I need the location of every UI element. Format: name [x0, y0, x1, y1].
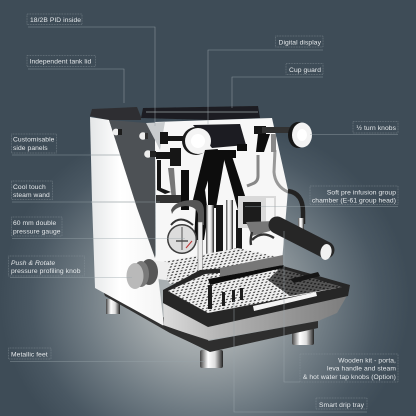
callout: soft pre infusion group chamber: Soft pre infusion group [327, 190, 396, 196]
callout: half turn knobs: ½ turn knobs [356, 124, 397, 132]
callout: customisable side panels: Customisable [13, 136, 55, 144]
white handle bar [253, 292, 317, 311]
callout: digital display: Digital display [279, 40, 322, 46]
callout: smart drip tray: Smart drip tray [319, 402, 365, 409]
callout: cup guard: Cup guard [289, 67, 321, 74]
chrome columns [171, 200, 242, 255]
right steam valve [247, 126, 290, 192]
callout: cup guard [232, 64, 323, 108]
callout: push and rotate pressure profiling knob: Push & Rotate [11, 260, 55, 267]
grate [168, 269, 342, 313]
callout: 18/2B PID inside: 18/2B PID inside [30, 17, 81, 24]
callout: customisable side panels: side panels [13, 145, 48, 152]
base underside [102, 288, 210, 349]
internals left of gauge [156, 132, 186, 203]
callout: push and rotate pressure profiling knob: pressure profiling knob [11, 268, 81, 275]
dark side panel [109, 120, 155, 258]
callout: cool touch steam wand [12, 181, 160, 202]
top gauge: digital display [182, 127, 211, 155]
display panel [193, 124, 246, 148]
callout: smart drip tray [234, 300, 367, 412]
group head [238, 191, 304, 245]
rim [163, 264, 350, 327]
callout: independent tank lid: Independent tank lid [30, 58, 92, 66]
callout: 18/2B PID inside [27, 14, 155, 126]
callout: 60 mm double pressure gauge: 60 mm double [13, 220, 57, 227]
cup rail grate [156, 248, 282, 284]
cup rest shelf [220, 255, 283, 277]
callout: cool touch steam wand: steam wand [13, 192, 50, 199]
pressure profiling knob [126, 259, 169, 289]
callout: customisable side panels [12, 134, 120, 155]
callout: soft pre infusion group chamber [245, 186, 398, 206]
callout: wooden kit [284, 231, 398, 382]
rear feet [106, 299, 314, 368]
callout: digital display [208, 36, 323, 125]
pressure gauge [167, 220, 197, 254]
lever slot [290, 272, 320, 283]
brew spout rod [198, 222, 202, 282]
left white side panel [90, 117, 164, 326]
lid [90, 106, 260, 120]
callout: soft pre infusion group chamber: chamber (E-61 group head) [312, 198, 396, 204]
callout: push and rotate pressure profiling knob [8, 256, 132, 278]
callout: metallic feet: Metallic feet [11, 352, 48, 358]
callout: wooden kit: & hot water tap knobs (Option) [303, 374, 396, 381]
callout: 60 mm double pressure gauge [12, 217, 185, 238]
portafilter handle: wooden kit option [277, 225, 333, 261]
black V columns [181, 144, 248, 240]
upper front white body [155, 118, 288, 262]
side bolts [113, 129, 156, 158]
callout: wooden kit: Wooden kit - porta, [338, 358, 396, 364]
callout: independent tank lid [27, 56, 124, 103]
half turn knob [288, 122, 312, 148]
tray pegs [208, 285, 243, 309]
drip tray [163, 255, 350, 352]
front panel [163, 294, 348, 340]
callout: half turn knobs [310, 122, 398, 134]
callout: metallic feet [8, 348, 205, 362]
callout: cool touch steam wand: Cool touch [13, 184, 46, 191]
callout: 60 mm double pressure gauge: pressure gauge [13, 228, 61, 236]
callout: wooden kit: leva handle and steam [327, 366, 396, 372]
espresso machine [90, 106, 350, 368]
